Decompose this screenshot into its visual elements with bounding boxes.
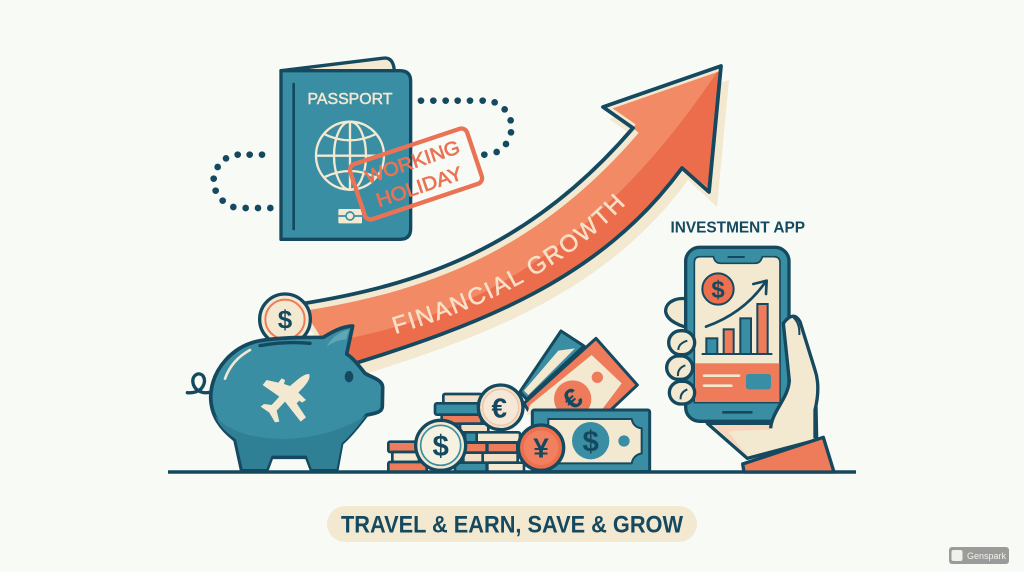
sleeve cuff	[743, 437, 834, 472]
bar chart	[702, 304, 772, 354]
euro coin	[478, 385, 523, 430]
phone screen	[694, 257, 780, 403]
phone lower panel	[695, 363, 779, 402]
orange banknote: €	[557, 382, 589, 416]
hand holding phone	[666, 247, 834, 472]
thumb	[770, 316, 818, 443]
passport spine	[290, 84, 298, 229]
money pile	[388, 331, 650, 472]
globe icon	[316, 122, 384, 190]
front banknote	[532, 410, 650, 472]
euro coin: €	[492, 392, 508, 423]
arrow: financial growth	[305, 64, 729, 373]
passport title: PASSPORT	[307, 91, 393, 108]
ground line	[168, 470, 856, 474]
passport cover	[281, 71, 411, 239]
working holiday stamp: WORKING	[363, 137, 463, 189]
coin icon: $	[711, 277, 725, 304]
passport pages	[281, 58, 394, 71]
pig ear shade	[327, 329, 349, 347]
teal banknote back	[520, 331, 584, 399]
watermark label: Genspark	[967, 551, 1006, 561]
panel text lines	[704, 376, 739, 386]
dollar coin: $	[433, 430, 449, 463]
plane icon	[261, 374, 310, 422]
pig body	[211, 326, 383, 471]
yen coin: ¥	[533, 433, 549, 464]
pig tail	[187, 374, 211, 393]
piggy bank	[187, 294, 383, 471]
orange banknote	[524, 338, 637, 418]
investment app label: INVESTMENT APP	[670, 220, 805, 236]
phone	[686, 247, 789, 421]
palm and wrist	[707, 407, 817, 458]
front banknote: $	[583, 425, 599, 458]
panel button	[746, 374, 771, 389]
watermark	[949, 547, 1009, 564]
coin stacks	[388, 394, 524, 472]
coin entering slot	[260, 294, 310, 345]
working holiday stamp: HOLIDAY	[374, 164, 465, 212]
pig belly shade	[215, 415, 367, 469]
watermark icon	[952, 550, 962, 561]
coin entering slot: $	[278, 305, 293, 335]
dotted route	[210, 97, 514, 211]
pig eye	[345, 371, 353, 382]
coin icon	[702, 273, 734, 305]
working holiday stamp	[348, 127, 484, 221]
slogan text: TRAVEL & EARN, SAVE & GROW	[341, 512, 684, 538]
thumbnail	[793, 317, 799, 335]
growth arrow	[706, 281, 767, 327]
palm shade	[713, 425, 770, 455]
fingers	[667, 331, 695, 404]
arrow label: FINANCIAL GROWTH	[392, 194, 625, 334]
dollar coin	[416, 420, 466, 470]
coin slot	[260, 343, 310, 346]
passport chip	[338, 209, 362, 223]
phone speaker	[728, 254, 744, 260]
thumb outline	[771, 316, 818, 438]
pig highlight	[225, 350, 250, 379]
passport with stamp and dotted route	[210, 58, 514, 239]
home bar	[723, 408, 751, 416]
slogan pill	[327, 506, 697, 542]
yen coin	[518, 425, 564, 470]
top finger	[666, 299, 693, 328]
